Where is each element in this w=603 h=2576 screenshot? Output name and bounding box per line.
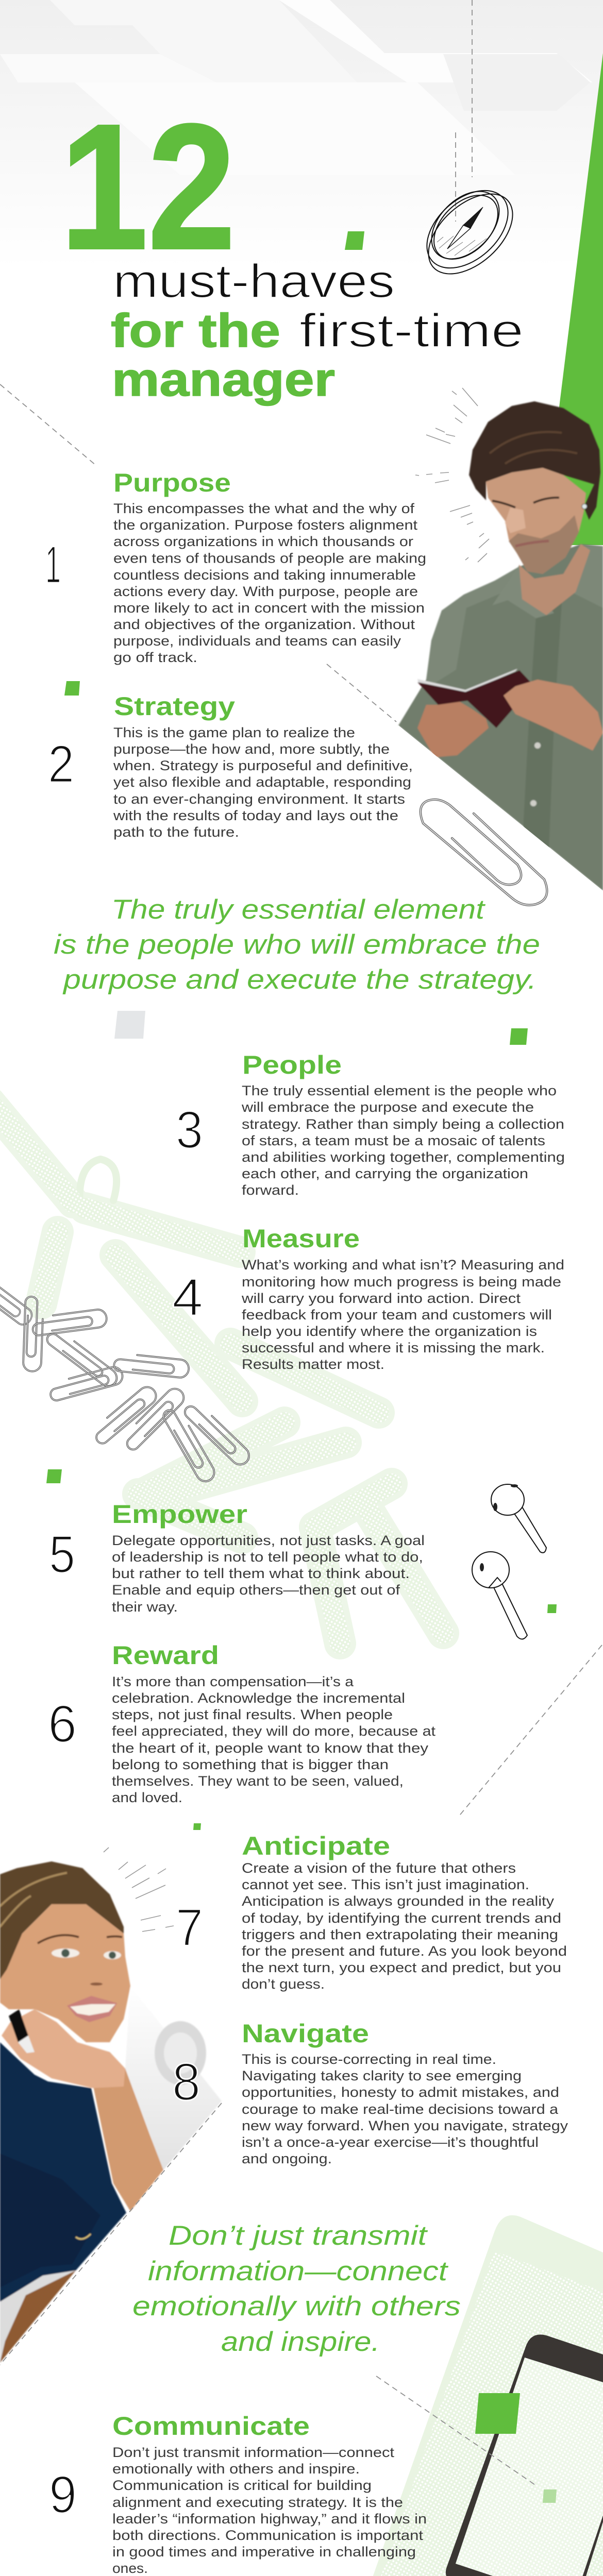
- green band: top right: [559, 53, 603, 545]
- body text Communicate: both directions. Communication is important: [112, 2528, 424, 2543]
- heading Navigate: Navigate: [242, 2019, 369, 2048]
- hand: [2, 2009, 125, 2088]
- body text Purpose: the organization. Purpose fosters alignment: [113, 517, 418, 533]
- body text Reward: the heart of it, people want to know that they: [112, 1740, 429, 1756]
- body text Measure: What’s working and what isn’t? Measuring and: [242, 1257, 564, 1273]
- body text Communicate: [112, 2445, 427, 2576]
- body text Anticipate: for the present and future. As you look beyond: [242, 1943, 567, 1959]
- body text Strategy: path to the future.: [113, 824, 239, 840]
- body text Measure: monitoring how much progress is being made: [242, 1274, 561, 1290]
- pull quote: people: is the people who will embrace the: [54, 929, 540, 960]
- navy blouse: [0, 2042, 126, 2302]
- number 9: 9: [49, 2465, 77, 2524]
- number 6: 6: [48, 1694, 77, 1753]
- heading Empower: Empower: [112, 1500, 247, 1529]
- pull quote: communicate: Don’t just transmit: [169, 2221, 428, 2251]
- green square accent: [510, 1028, 528, 1045]
- background: pale phone shape: [356, 2215, 603, 2576]
- left hand: [417, 700, 489, 757]
- body text Purpose: and objectives of the organization. Without: [113, 617, 415, 632]
- photo: smiling woman: [0, 1861, 222, 2363]
- body text Reward: feel appreciated, they will do more, because at: [112, 1723, 436, 1739]
- lips: [515, 541, 549, 546]
- section 7: Anticipate: [176, 1832, 567, 1992]
- body text Purpose: countless decisions and taking innumerable: [113, 567, 416, 583]
- rays around the woman: [104, 1848, 174, 1931]
- dashed guide line: [458, 1645, 602, 1818]
- gray square accent: [114, 1011, 145, 1039]
- green square accent: [475, 2393, 520, 2434]
- body text Anticipate: of today, by identifying the current trends and: [242, 1910, 561, 1926]
- lower arm: [0, 2270, 76, 2363]
- body text Reward: steps, not just final results. When people: [112, 1707, 393, 1722]
- section 2: Strategy: [48, 692, 413, 840]
- icon: large paperclip: [421, 800, 547, 905]
- pull quote: communicate: and inspire.: [221, 2327, 380, 2357]
- green square accent: [193, 1823, 201, 1830]
- dashed diagonal along photo: [0, 2103, 222, 2365]
- heading Communicate: Communicate: [112, 2412, 310, 2441]
- dashed guide lines: top: [0, 0, 472, 722]
- body text Navigate: new way forward. When you navigate, strategy: [242, 2118, 568, 2133]
- number 3: 3: [176, 1100, 203, 1159]
- pull quote: people: [54, 894, 540, 995]
- body text Purpose: across organizations in which thousands or: [113, 534, 413, 549]
- green period block: [345, 231, 364, 250]
- eyebrows: [38, 1935, 122, 1943]
- title line 2: for the: [111, 304, 280, 357]
- body text Strategy: [113, 725, 413, 840]
- body text Navigate: [242, 2052, 568, 2166]
- body text Reward: celebration. Acknowledge the incremental: [112, 1690, 405, 1706]
- body text Strategy: when. Strategy is purposeful and definitive,: [113, 758, 413, 773]
- body text Measure: help you identify where the organization is: [242, 1324, 537, 1339]
- body text Strategy: This is the game plan to realize the: [113, 725, 355, 740]
- beard shadow: [509, 515, 579, 574]
- body text Empower: [112, 1533, 425, 1615]
- body text Reward: It’s more than compensation—it’s a: [112, 1674, 354, 1689]
- heading Anticipate: Anticipate: [242, 1832, 390, 1860]
- white diagonal mask: [387, 725, 603, 917]
- body text Purpose: This encompasses the what and the why of: [113, 501, 415, 516]
- marker: [9, 2009, 28, 2042]
- pale green square accent: [543, 2489, 557, 2503]
- number 5: 5: [49, 1525, 75, 1584]
- body text Strategy: yet also flexible and adaptable, responding: [113, 774, 411, 790]
- body text Empower: of leadership is not to tell people what to do,: [112, 1549, 423, 1565]
- body text Navigate: opportunities, honesty to admit mistakes, and: [242, 2084, 559, 2100]
- body text Reward: [112, 1674, 436, 1805]
- body text Anticipate: triggers and then extrapolating their meaning: [242, 1927, 558, 1942]
- body text People: [241, 1083, 565, 1198]
- title: 12 must-haves for the first-time manager: [60, 88, 524, 406]
- body text Anticipate: [242, 1860, 567, 1992]
- green square accent: [547, 1604, 557, 1613]
- body text Purpose: even tens of thousands of people are making: [113, 550, 426, 566]
- body text Strategy: to an ever-changing environment. It starts: [113, 791, 405, 807]
- body text People: of stars, a team must be a mosaic of talents: [242, 1133, 545, 1148]
- body text Communicate: leader’s “information highway,” and it flows in: [112, 2511, 427, 2527]
- section 4: Measure: [172, 1224, 564, 1372]
- body text People: The truly essential element is the people who: [242, 1083, 557, 1098]
- body text Purpose: actions every day. With purpose, people are: [113, 584, 418, 599]
- eyes and brows: [492, 498, 559, 507]
- body text People: each other, and carrying the organization: [242, 1166, 528, 1181]
- number 2: 2: [48, 735, 74, 793]
- body text Communicate: Communication is critical for building: [112, 2478, 372, 2493]
- body text Communicate: emotionally with others and inspire.: [112, 2461, 360, 2477]
- green square accent: [64, 681, 80, 696]
- pull quote: people: purpose and execute the strategy.: [62, 964, 537, 995]
- body text Anticipate: cannot yet see. This isn’t just imagination.: [242, 1877, 529, 1892]
- body text Navigate: courage to make real-time decisions toward a: [242, 2102, 559, 2117]
- body text Measure: [241, 1257, 564, 1372]
- section 3: People: [176, 1050, 565, 1198]
- heading Strategy: Strategy: [114, 692, 235, 721]
- body text Communicate: Don’t just transmit information—connect: [112, 2445, 395, 2460]
- green square accent: [46, 1469, 62, 1483]
- body text People: forward.: [242, 1182, 299, 1198]
- body text Anticipate: the next turn, you expect and predict, but you: [242, 1960, 561, 1975]
- section 9: Communicate: [49, 2412, 427, 2576]
- shirt: [398, 544, 603, 891]
- section 1: Purpose: [45, 468, 426, 665]
- mouth: [67, 1996, 117, 2022]
- number 1: 1: [45, 535, 61, 594]
- body text Navigate: Navigating takes clarity to see emerging: [242, 2068, 522, 2083]
- body text Empower: but rather to tell them what to think about.: [112, 1566, 410, 1581]
- body text Communicate: alignment and executing strategy. It is the: [112, 2495, 403, 2510]
- number 4: 4: [172, 1268, 203, 1327]
- rays around the man: [415, 388, 489, 562]
- section 8: Navigate: [172, 2019, 568, 2166]
- section 5: Empower: [49, 1500, 425, 1615]
- icon: earbuds: [472, 1484, 546, 1639]
- lower background: [0, 2270, 76, 2363]
- body text Reward: and loved.: [112, 1790, 182, 1805]
- shirt buttons: [534, 742, 541, 749]
- right hand: [504, 680, 603, 751]
- background: crumpled paper texture: [0, 0, 603, 268]
- title line 1: must-haves: [113, 255, 395, 308]
- body text Reward: belong to something that is bigger than: [112, 1757, 389, 1772]
- body text Anticipate: Create a vision of the future that others: [242, 1860, 516, 1876]
- body text Purpose: go off track.: [113, 650, 197, 665]
- pull quote: communicate: [132, 2221, 461, 2357]
- neck: [519, 544, 590, 615]
- body text Empower: Enable and equip others—then get out of: [112, 1582, 400, 1598]
- heading Purpose: Purpose: [113, 468, 231, 497]
- heading Reward: Reward: [112, 1641, 219, 1670]
- body text Navigate: and ongoing.: [242, 2151, 332, 2166]
- body text Measure: feedback from your team and customers will: [242, 1307, 552, 1323]
- body text Anticipate: don’t guess.: [242, 1976, 325, 1992]
- body text Communicate: ones.: [112, 2561, 148, 2576]
- icon: smartphone: [446, 2334, 603, 2576]
- nose shadow: [90, 1982, 103, 1986]
- body text People: strategy. Rather than simply being a collection: [242, 1116, 564, 1132]
- hair: [469, 401, 600, 520]
- pull quote: people: The truly essential element: [111, 894, 486, 925]
- photo: man reading a passport: [398, 401, 603, 891]
- body text Purpose: purpose, individuals and teams can easily: [113, 633, 401, 649]
- passport: [417, 669, 533, 728]
- body text Strategy: purpose—the how and, more subtly, the: [113, 741, 390, 757]
- blurred background figure: [125, 1986, 222, 2170]
- body text People: will embrace the purpose and execute the: [241, 1099, 534, 1115]
- body text Empower: Delegate opportunities, not just tasks. A goal: [112, 1533, 425, 1548]
- big number 12: 12: [60, 88, 236, 286]
- body text Empower: their way.: [112, 1599, 178, 1615]
- heading People: People: [242, 1050, 342, 1079]
- body text People: and abilities working together, complementing: [242, 1149, 565, 1165]
- body text Reward: themselves. They want to be seen, valued,: [112, 1773, 404, 1789]
- hair: [0, 1861, 124, 1979]
- icon: compass: [412, 175, 527, 289]
- number 8: 8: [172, 2053, 200, 2111]
- dashed guide line: [376, 2376, 537, 2486]
- body text Measure: will carry you forward into action. Direct: [241, 1291, 521, 1306]
- body text Anticipate: Anticipation is always grounded in the reality: [242, 1893, 555, 1909]
- eyes: [52, 1948, 121, 1959]
- face: [486, 468, 586, 574]
- body text Purpose: more likely to act in concert with the mission: [113, 600, 425, 616]
- pull quote: communicate: information—connect: [148, 2256, 449, 2286]
- heading Measure: Measure: [242, 1224, 360, 1253]
- pull quote: communicate: emotionally with others: [132, 2291, 461, 2321]
- body text Communicate: in good times and imperative in challenging: [112, 2544, 416, 2560]
- cuff ring: [76, 2234, 91, 2239]
- section 6: Reward: [48, 1641, 436, 1805]
- title line 2 light: first-time: [299, 304, 524, 357]
- body text Purpose: [113, 501, 426, 665]
- number 7: 7: [176, 1898, 203, 1957]
- body text Navigate: This is course-correcting in real time.: [242, 2052, 496, 2067]
- body text Measure: Results matter most.: [242, 1357, 384, 1372]
- background: pale halftone paperclips: [0, 1103, 443, 1643]
- forearm: [93, 2069, 163, 2211]
- body text Strategy: with the results of today and lays out the: [113, 808, 398, 823]
- body text Measure: successful and where it is missing the mark.: [242, 1340, 545, 1355]
- earring: [582, 504, 587, 509]
- body text Navigate: isn’t a once-a-year exercise—it’s thoughtful: [242, 2134, 539, 2150]
- nose highlight: [505, 507, 526, 533]
- face: [0, 1904, 130, 2042]
- title line 3: manager: [112, 353, 335, 406]
- icon: scattered paperclips: [0, 1276, 253, 1485]
